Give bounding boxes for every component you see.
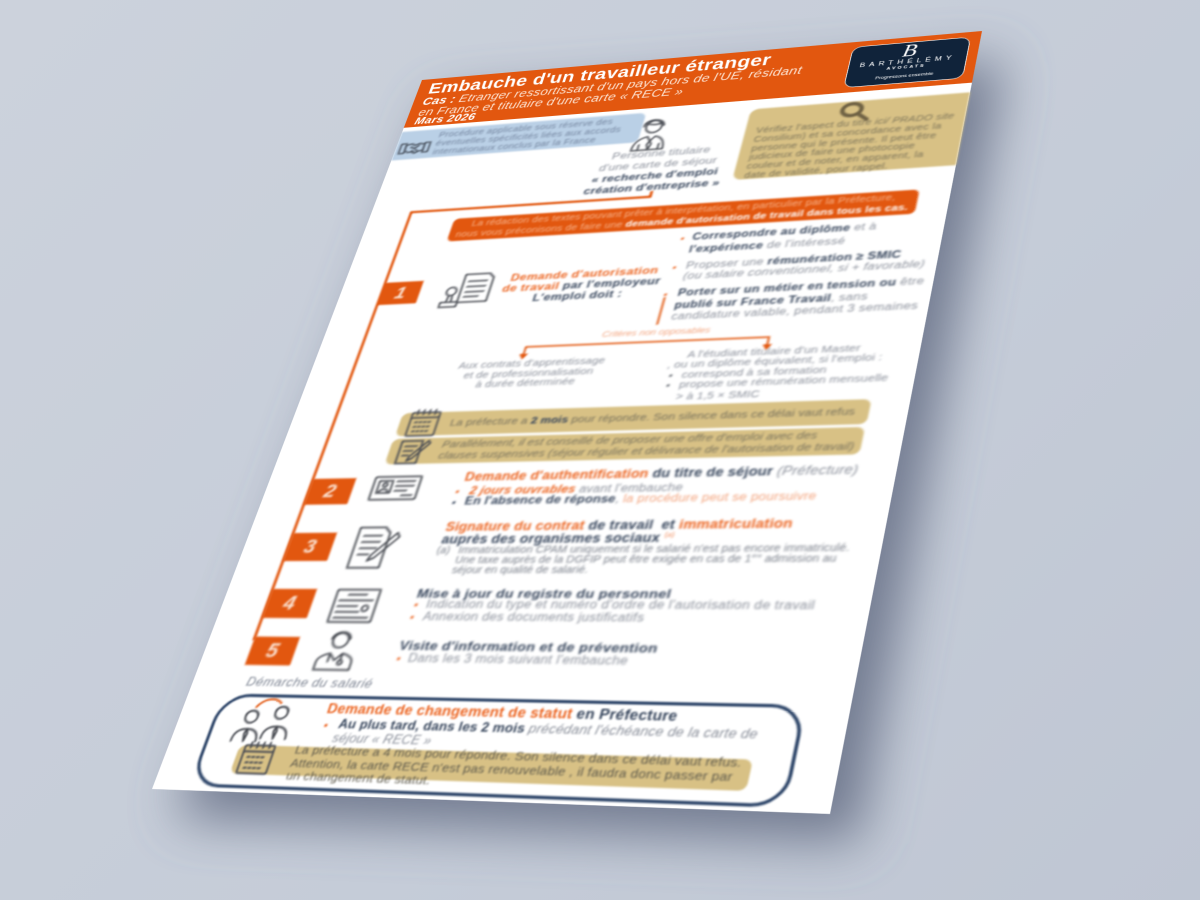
exception: apprenticeship <box>457 355 607 390</box>
delay text: La préfecture a 2 mois pour répondre. Son silence dans ce délai vaut refus <box>448 406 856 428</box>
callout: response delay <box>395 399 872 436</box>
exception: apprenticeship: et de professionnalisation <box>462 365 595 381</box>
step 1 heading: Demande d'autorisation <box>509 264 660 283</box>
job criteria list: publié sur France Travail, sans <box>673 291 869 311</box>
logo <box>843 37 971 88</box>
person description <box>582 144 721 197</box>
step 1 marker: 1 <box>392 284 409 302</box>
step 4 text: Indication du type et numéro d'ordre de l'autorisation de travail <box>424 598 816 612</box>
step 3 marker <box>283 533 337 561</box>
icon: document and stamp <box>436 271 496 310</box>
icon: signing pen <box>392 438 433 466</box>
step 2 text: Demande d'authentification du titre de séjour (Préfecture) <box>463 462 860 484</box>
warning text: Attention, la carte RECE n'est pas renouvelable , il faudra donc passer par <box>289 756 734 784</box>
clauses text: clauses suspensives (séjour régulier et délivrance de l'autorisation de travail) <box>437 440 855 461</box>
step 2 text: 2 jours ouvrables avant l'embauche <box>468 482 684 497</box>
exception: master student: A l'étudiant titulaire d'un Master <box>686 342 862 360</box>
step 1 marker <box>377 281 424 305</box>
tip text: Vérifiez l'aspect du titre ici/ PRADO site <box>755 111 955 135</box>
person description: création d'entreprise » <box>582 177 721 197</box>
tip text: Consilium) et sa concordance avec la <box>753 121 942 144</box>
person description: « recherche d'emploi <box>590 166 719 185</box>
icon: person <box>628 118 667 153</box>
step 5 text <box>395 638 660 668</box>
timeline connector <box>250 190 655 642</box>
icon: staff register <box>325 587 384 625</box>
step 2 marker: 2 <box>321 481 339 501</box>
step 3 heading: auprès des organismes sociaux (a) <box>440 530 676 546</box>
note text: Procédure applicable sous réserve des <box>438 117 614 139</box>
step 3 footnote: Immatriculation CPAM uniquement si le salarié n'est pas encore immatriculé. <box>457 542 851 555</box>
logo tagline: Progressons ensemble <box>875 71 934 81</box>
arrows: non-opposable criteria <box>518 296 774 360</box>
exception: master student: correspond à sa formation <box>680 364 828 381</box>
step 3 footnote: séjour en qualité de salarié. <box>450 564 590 575</box>
header band <box>404 31 982 128</box>
step 3 footnote: Une taxe auprès de la DGFIP peut être exigée en cas de 1ère admission au <box>454 553 838 565</box>
logo monogram: B <box>901 40 919 61</box>
note text <box>431 117 622 156</box>
status change heading: Demande de changement de statut en Préfecture <box>325 701 679 724</box>
step 4 marker <box>262 589 317 618</box>
step 1 heading: L'emploi doit : <box>531 288 624 304</box>
job criteria list: Porter sur un métier en tension ou être <box>676 276 925 298</box>
step 2 marker <box>304 478 356 505</box>
step 5 marker <box>245 637 300 665</box>
step 3 heading <box>440 516 794 548</box>
status change text: Au plus tard, dans les 2 mois précédant l'échéance de la carte de <box>337 718 759 742</box>
icon: magnifier <box>838 101 870 122</box>
person description: d'une carte de séjour <box>598 155 719 174</box>
step 3 marker: 3 <box>301 536 319 557</box>
person description: Personne titulaire <box>611 144 712 162</box>
date: Mars 2026 <box>413 111 477 127</box>
tip text <box>743 111 955 180</box>
tip text: personne qui le présente. Il peut être <box>750 131 937 153</box>
exception: master student: , ou un diplôme équivalent, si l'emploi : <box>666 352 884 371</box>
icon: two people <box>228 697 291 744</box>
status change text: séjour « RECE » <box>330 732 433 748</box>
step 1 heading: de travail par l'employeur <box>501 275 662 294</box>
case description: en France et titulaire d'une carte « RECE » <box>417 85 685 119</box>
step 5 marker: 5 <box>263 640 282 662</box>
step 2 text <box>450 462 860 507</box>
exception: apprenticeship: à durée déterminée <box>474 376 576 390</box>
step 3 footnote <box>435 542 851 576</box>
logo subtitle: AVOCATS <box>886 64 926 71</box>
step 4 text: Annexion des documents justificatifs <box>421 611 646 625</box>
step 3 heading: Signature du contrat de travail et immatriculation <box>444 516 794 534</box>
warning text: un changement de statut. <box>284 769 433 788</box>
panel: status change <box>188 693 807 808</box>
job criteria list: candidature valable, pendant 3 semaines <box>670 300 919 322</box>
document page <box>152 31 982 814</box>
advisory banner: nous vous préconisons de faire une demande d'autorisation de travail dans tous les cas. <box>454 203 909 239</box>
step 4 text: Mise à jour du registre du personnel <box>415 586 673 601</box>
logo name: BARTHÉLÉMY <box>859 54 956 69</box>
warning text: La préfecture a 4 mois pour répondre. Son silence dans ce délai vaut refus. <box>293 743 743 770</box>
icon: doctor <box>310 630 354 673</box>
step 3 footnote: (a) <box>435 545 452 555</box>
case description: Cas : Etranger ressortissant d'un pays hors de l'UE, résidant <box>421 64 803 108</box>
panel: verification tip <box>732 92 970 180</box>
panel: international agreements note <box>391 113 646 161</box>
exception: master student <box>665 342 890 402</box>
icon: calendar <box>234 740 278 776</box>
step 5 text: Visite d'information et de prévention <box>397 638 660 656</box>
note text: éventuelles spécificités liées aux accords <box>434 125 622 147</box>
exception: master student: > à 1,5 × SMIC <box>674 388 761 402</box>
icon: contract and pen <box>344 525 402 570</box>
step 2 text: En l'absence de réponse, la procédure peut se poursuivre <box>463 490 818 507</box>
step 5 text: Dans les 3 mois suivant l'embauche <box>406 652 630 668</box>
clauses text <box>437 429 855 461</box>
advisory banner <box>447 189 920 242</box>
title: Embauche d'un travailleur étranger <box>426 51 773 97</box>
advisory banner: La rédaction des textes pouvant prêter à interprétation, en particulier par la Préfecture, <box>470 193 897 228</box>
clauses text: Parallèlement, il est conseillé de proposer une offre d'emploi avec des <box>440 429 819 450</box>
step 4 text <box>408 586 816 625</box>
exception: master student: propose une rémunération mensuelle <box>678 372 890 390</box>
job criteria list: Correspondre au diplôme et à <box>691 221 878 242</box>
tip text: couleur et de noter, en apparent, la <box>745 150 924 171</box>
icon: ID card <box>366 474 424 502</box>
icon: handshake <box>396 140 433 156</box>
job criteria list: Proposer une rémunération ≥ SMIC <box>685 249 902 271</box>
callout: renewal warning <box>230 745 753 791</box>
criteria label: Critères non opposables <box>601 325 712 339</box>
tip text: date de validité, pour rappel. <box>743 161 889 180</box>
job criteria list: (ou salaire conventionnel, si + favorable) <box>682 259 926 282</box>
job criteria list: l'expérience de l'intéressé <box>688 236 846 255</box>
tip text: judicieux de faire une photocopie <box>748 141 916 162</box>
icon: calendar <box>403 408 443 438</box>
note text: internationaux conclus par la France <box>431 135 597 156</box>
job criteria list <box>662 221 926 322</box>
warning text <box>284 743 743 788</box>
step 1 heading <box>500 264 662 304</box>
callout: suspensive clauses <box>384 427 865 464</box>
exception: apprenticeship: Aux contrats d'apprentissage <box>457 355 607 371</box>
employee procedure label: Démarche du salarié <box>244 675 375 691</box>
step 4 marker: 4 <box>280 592 299 614</box>
